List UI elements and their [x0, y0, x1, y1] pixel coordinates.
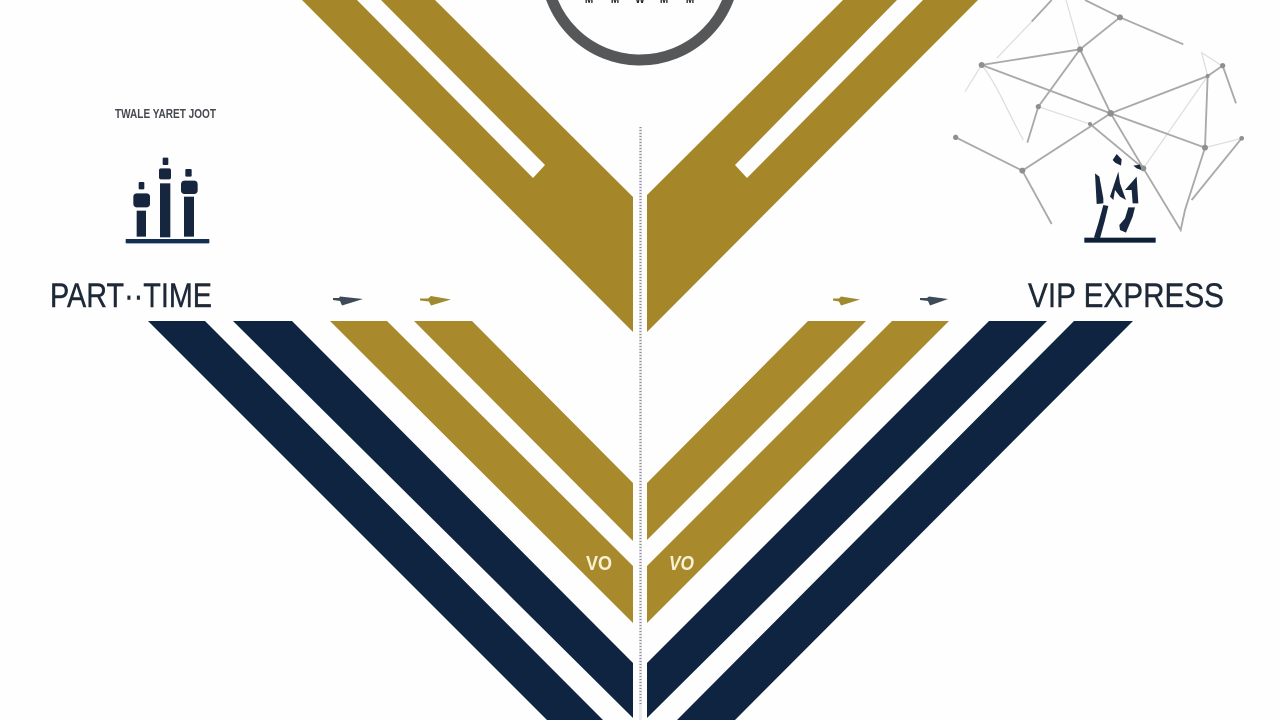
icon: stylised figures on base: [1084, 154, 1156, 243]
top left gold chevron: [302, 0, 633, 332]
arrow: left gold: [420, 296, 451, 306]
right vo label: VO: [669, 553, 694, 575]
center dotted divider: [639, 127, 642, 720]
right navy stripe outer: [677, 321, 1133, 720]
arrow: left navy: [333, 296, 363, 306]
right navy stripe inner: [647, 321, 1047, 718]
arrow: right navy: [920, 296, 948, 306]
left navy stripe outer: [148, 321, 603, 720]
label: vip express: VIP EXPRESS: [1028, 277, 1224, 315]
right gold stripe upper: [647, 321, 866, 540]
network diagram: [953, 0, 1244, 230]
left small caption: TWALE YARET JOOT: [115, 106, 216, 121]
left navy stripe inner: [233, 321, 633, 718]
label: part-time: PART··TIME: [50, 277, 212, 315]
left gold stripe upper: [414, 321, 633, 541]
left gold stripe lower: [330, 321, 633, 623]
icon: bars / part-time figures: [126, 158, 209, 243]
top right gold chevron: [647, 0, 978, 332]
right gold stripe lower: [647, 321, 949, 623]
arrow: right gold: [833, 296, 860, 306]
top circle badge: [546, 0, 734, 60]
left vo label: VO: [586, 553, 612, 575]
